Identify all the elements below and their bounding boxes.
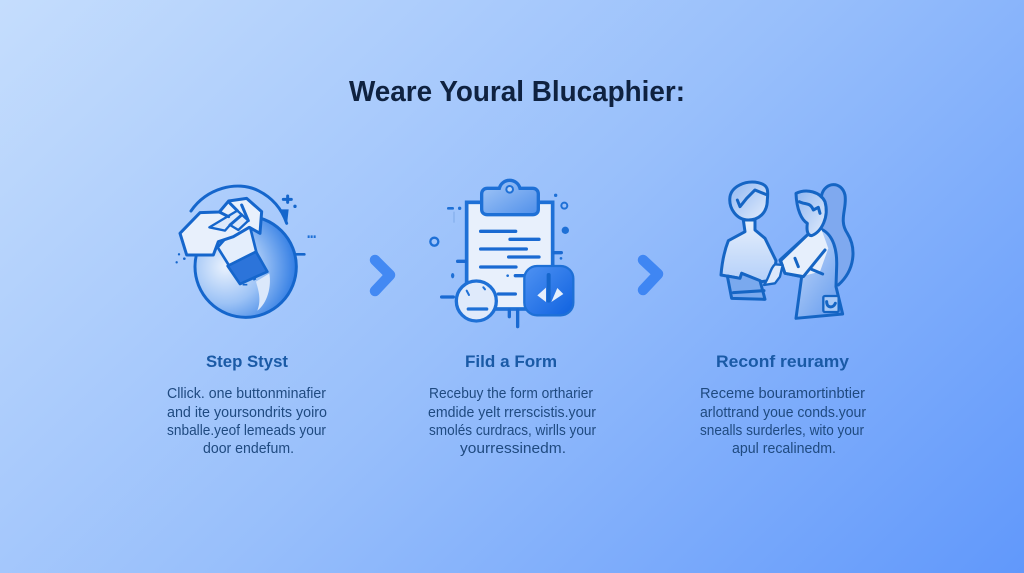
step description: smolés curdracs, wirlls your [429, 423, 596, 439]
step description: snealls surderles, wito your [700, 423, 864, 439]
icon: clipboard form [430, 180, 573, 327]
step description [428, 386, 596, 457]
step description: apul recalinedm. [732, 441, 836, 457]
step description: snballe.yeof lemeads your [167, 423, 326, 439]
step heading: Reconf reuramy [716, 352, 850, 371]
panel: step 1 [167, 186, 327, 457]
step description: yourressinedm. [460, 441, 566, 457]
arrow 1 [375, 260, 390, 291]
step description: emdide yelt rrerscistis.your [428, 405, 596, 421]
icon: hand over globe [175, 186, 316, 317]
step description: and ite yoursondrits yoiro [167, 405, 327, 421]
step heading: Fild a Form [465, 352, 557, 371]
step description: Receme bouramortinbtier [700, 386, 865, 402]
title: Weare Youral Blucaphier: [349, 76, 685, 108]
step description: Recebuy the form ortharier [429, 386, 593, 402]
step description [700, 386, 866, 457]
panel: step 2 [428, 180, 596, 457]
step heading: Step Styst [206, 352, 288, 371]
arrow 2 [643, 260, 658, 290]
step description [167, 386, 327, 457]
step description: door endefum. [203, 441, 294, 457]
icon: two people [721, 182, 853, 318]
step description: arlottrand youe conds.your [700, 405, 866, 421]
step description: Cllick. one buttonminafier [167, 386, 326, 402]
panel: step 3 [700, 182, 866, 457]
